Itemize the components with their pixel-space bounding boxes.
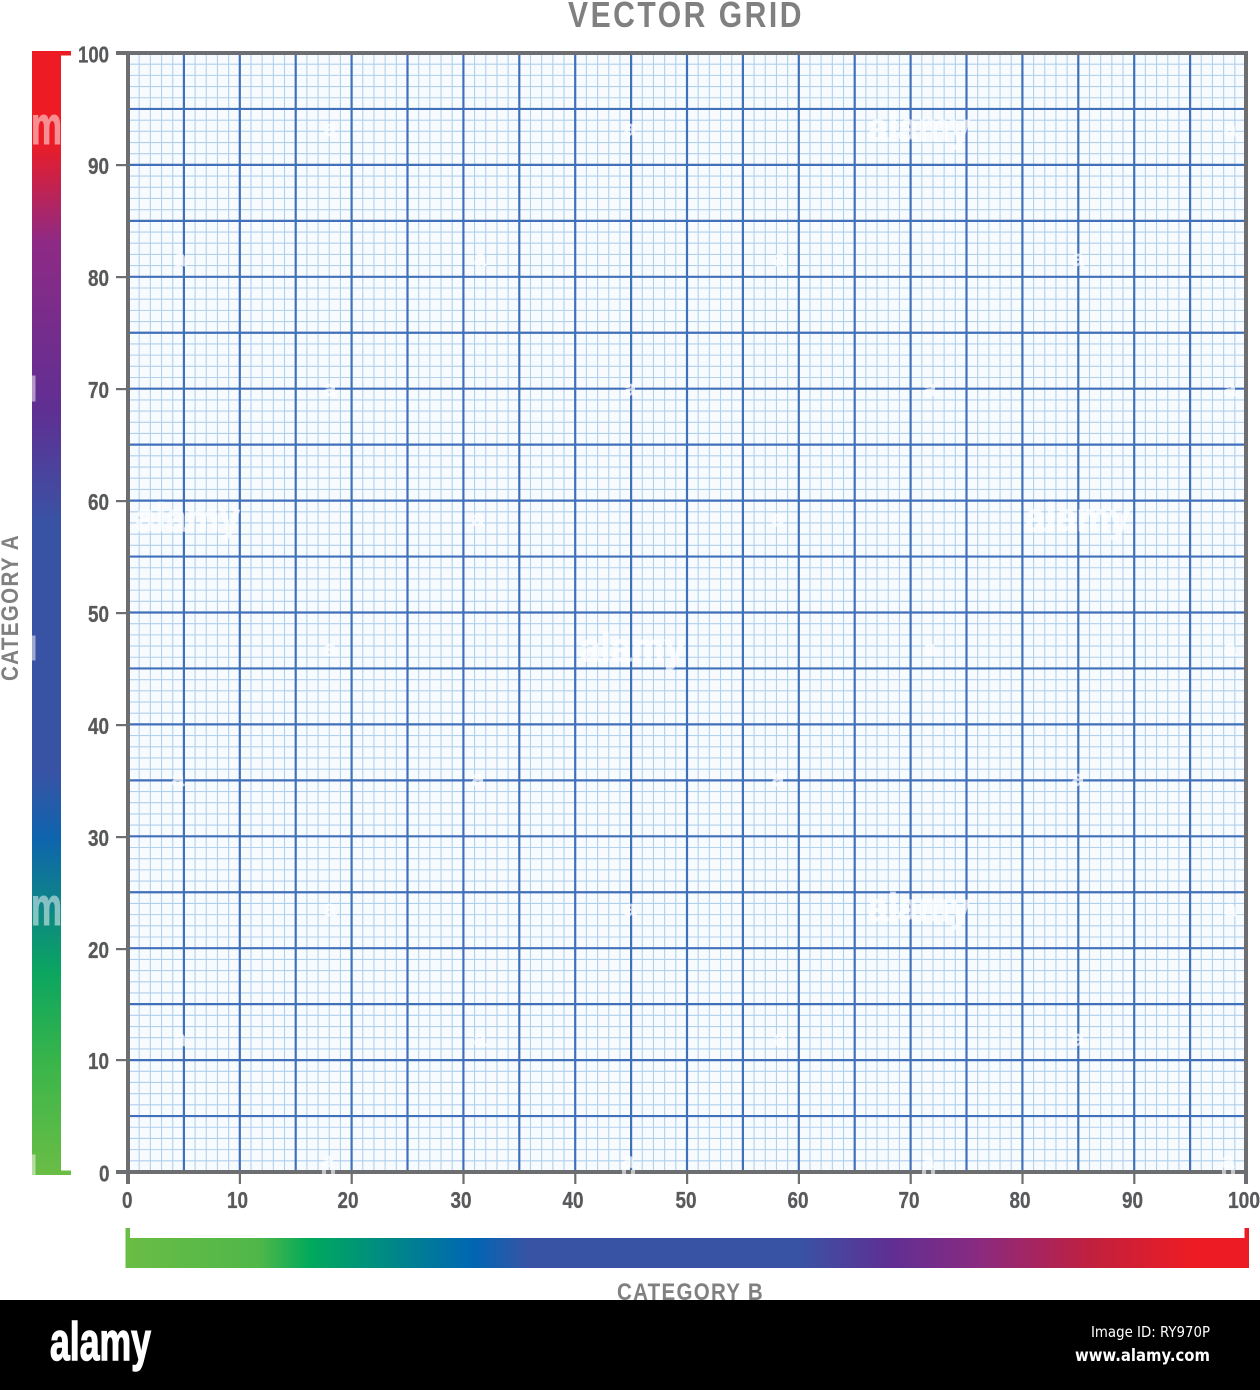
watermark overlay on grid: a <box>1222 1148 1235 1173</box>
watermark overlay on grid: alamy <box>580 626 686 670</box>
plot frame and tick marks <box>116 51 1248 1184</box>
x axis labels <box>122 1187 1260 1213</box>
panel: grid plot <box>128 53 1246 1172</box>
y axis labels: 50 <box>88 601 109 627</box>
vertical gradient bar: category A: m <box>31 96 62 156</box>
watermark overlay on grid: a <box>924 636 937 661</box>
watermark overlay on grid: a <box>772 506 785 531</box>
watermark overlay on grid: a <box>324 636 337 661</box>
watermark overlay on grid: a <box>324 116 337 141</box>
y axis labels: 100 <box>78 42 109 68</box>
x axis labels: 70 <box>898 1187 920 1213</box>
watermark overlay on grid: a <box>1072 246 1085 271</box>
x axis labels: 50 <box>676 1187 696 1213</box>
watermark overlay on grid: a <box>324 376 337 401</box>
watermark overlay on grid: a <box>1224 376 1237 401</box>
footer band <box>0 1300 1260 1390</box>
watermark overlay on grid: a <box>174 246 187 271</box>
y axis labels: 0 <box>99 1160 110 1186</box>
x axis labels: 0 <box>122 1187 132 1213</box>
label: category B: CATEGORY B <box>617 1279 764 1306</box>
watermark overlay on grid: a <box>324 896 337 921</box>
y axis labels: 80 <box>88 265 109 291</box>
x axis labels: 20 <box>338 1187 358 1213</box>
watermark overlay on grid: a <box>624 376 637 401</box>
y axis labels: 70 <box>88 377 109 403</box>
watermark overlay on grid: a <box>924 376 937 401</box>
y axis labels: 30 <box>88 825 109 851</box>
watermark overlay on grid: a <box>322 1148 335 1173</box>
y axis labels: 40 <box>88 713 109 739</box>
watermark overlay on grid: a <box>1072 766 1085 791</box>
footer logo: alamy <box>50 1312 151 1372</box>
x axis labels: 90 <box>1122 1187 1143 1213</box>
watermark overlay on grid: a <box>474 246 487 271</box>
y axis labels: 20 <box>88 937 109 963</box>
horizontal gradient bar: category B <box>126 1228 1249 1268</box>
y axis labels: 60 <box>88 489 109 515</box>
y axis labels: 90 <box>88 153 109 179</box>
watermark overlay on grid: a <box>622 1148 635 1173</box>
watermark overlay on grid: a <box>774 246 787 271</box>
watermark overlay on grid: a <box>474 1026 487 1051</box>
watermark overlay on grid <box>135 106 1237 1173</box>
watermark overlay on grid: a <box>624 896 637 921</box>
watermark overlay on grid: a <box>772 766 785 791</box>
watermark overlay on grid: a <box>922 1148 935 1173</box>
watermark overlay on grid: a <box>472 506 485 531</box>
x axis labels: 10 <box>227 1187 248 1213</box>
footer image id: Image ID: RY970P <box>1091 1323 1210 1341</box>
watermark overlay on grid: a <box>774 1026 787 1051</box>
watermark overlay on grid: a <box>1072 1026 1085 1051</box>
watermark overlay on grid: a <box>472 766 485 791</box>
y axis labels: 10 <box>88 1048 109 1074</box>
watermark overlay on grid: a <box>1224 116 1237 141</box>
x axis labels: 40 <box>562 1187 584 1213</box>
footer website: www.alamy.com <box>1075 1346 1210 1366</box>
x axis labels: 60 <box>788 1187 808 1213</box>
watermark overlay on grid: a <box>1224 636 1237 661</box>
watermark overlay on grid: a <box>1224 896 1237 921</box>
vertical gradient bar: category A <box>31 51 71 1175</box>
watermark overlay on grid: alamy <box>868 106 971 150</box>
x axis labels: 30 <box>450 1187 472 1213</box>
watermark overlay on grid: a <box>172 766 185 791</box>
vertical gradient bar: category A: m <box>31 877 62 937</box>
watermark overlay on grid: a <box>624 116 637 141</box>
watermark overlay on grid: a <box>174 1026 187 1051</box>
y axis labels <box>78 42 110 1186</box>
watermark overlay on grid: alamy <box>135 496 241 540</box>
x axis labels: 80 <box>1010 1187 1030 1213</box>
watermark overlay on grid: alamy <box>1025 496 1131 540</box>
watermark overlay on grid: alamy <box>868 886 971 930</box>
